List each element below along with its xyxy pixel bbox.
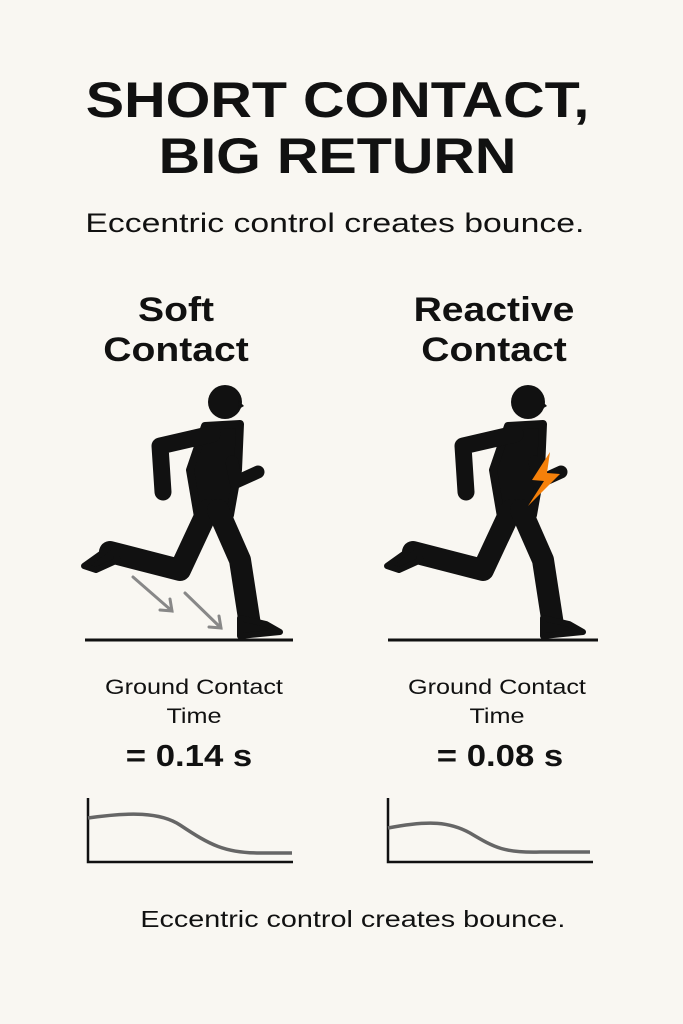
runner: soft — [84, 385, 280, 636]
label: reactive contact time: Time — [469, 705, 525, 728]
chart: soft — [88, 798, 293, 862]
label: reactive contact time — [408, 676, 586, 728]
heading: soft contact: Soft — [138, 291, 214, 329]
title: SHORT CONTACT, — [86, 72, 589, 128]
subtitle: Eccentric control creates bounce. — [85, 208, 584, 238]
icon: lightning bolt — [528, 452, 560, 506]
heading: reactive contact: Reactive — [414, 291, 574, 329]
label: reactive contact time: Ground Contact — [408, 676, 586, 699]
heading: soft contact: Contact — [103, 331, 249, 369]
ground line reactive — [388, 638, 598, 642]
footer text: Eccentric control creates bounce. — [140, 906, 565, 932]
label: soft contact time: Time — [166, 705, 222, 728]
value: reactive: = 0.08 s — [437, 738, 563, 773]
label: soft contact time: Ground Contact — [105, 676, 283, 699]
title — [86, 72, 589, 184]
heading: soft contact — [103, 291, 249, 369]
heading: reactive contact: Contact — [421, 331, 567, 369]
arrows: soft landing — [133, 577, 221, 628]
value: soft: = 0.14 s — [126, 738, 252, 773]
ground line soft — [85, 638, 293, 642]
chart: reactive — [388, 798, 593, 862]
heading: reactive contact — [414, 291, 574, 369]
runner: reactive — [387, 385, 583, 636]
title: BIG RETURN — [159, 128, 516, 184]
label: soft contact time — [105, 676, 283, 728]
